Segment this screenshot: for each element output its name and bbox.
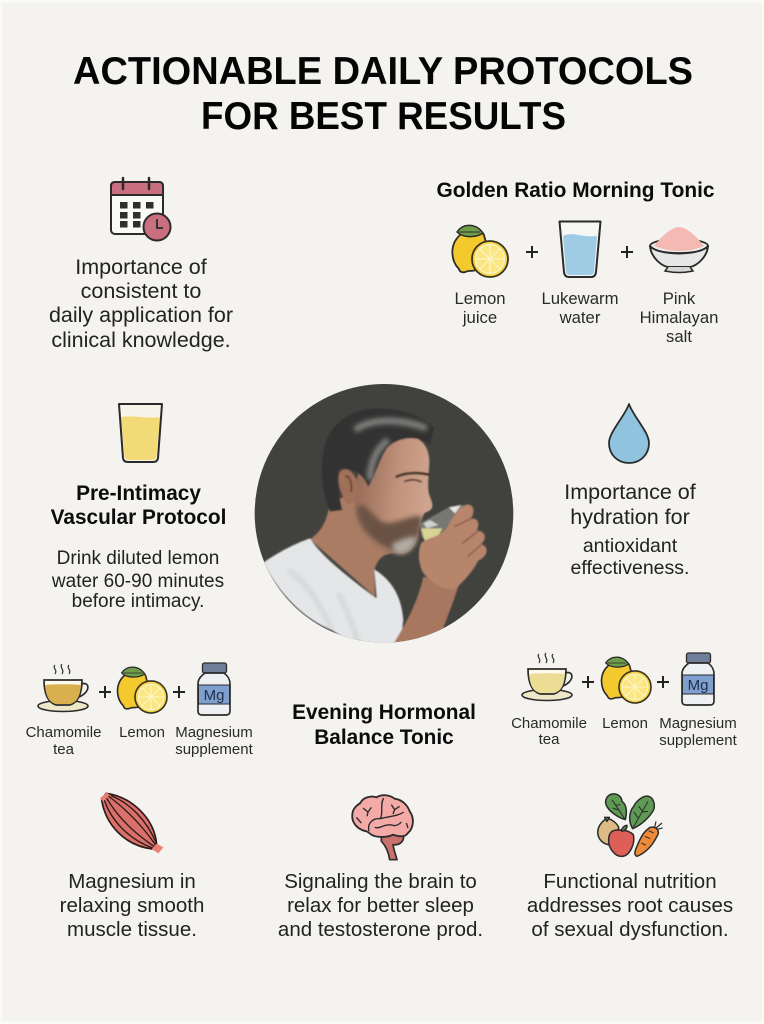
panel: evening tonic right ingredients (511, 653, 738, 749)
panel: golden ratio morning tonic (436, 179, 718, 346)
icon: chamomile tea (522, 653, 572, 700)
icon: plus (621, 246, 633, 258)
labels: right ingredients: Lemon (602, 715, 648, 732)
icon: magnesium bottle (198, 663, 230, 715)
icon: lemon (118, 667, 167, 713)
labels: right ingredients: tea (539, 731, 560, 748)
labels: morning ingredients: water (559, 308, 601, 327)
text: brain: Signaling the brain to (284, 870, 477, 893)
labels: morning ingredients: Lemon (454, 289, 506, 308)
panel: brain signaling (278, 795, 483, 941)
heading: pre-intimacy: Vascular Protocol (51, 506, 226, 529)
labels: right ingredients: supplement (659, 732, 738, 749)
icon: magnesium bottle (682, 653, 714, 705)
text: consistency: Importance of (75, 255, 207, 279)
icon: lemon (452, 225, 508, 277)
labels: morning ingredients: Pink (663, 289, 696, 308)
icon: water drop (609, 404, 649, 463)
shirt (263, 538, 403, 647)
text: consistency: daily application for (49, 303, 233, 327)
icon: plus (526, 246, 538, 258)
text: magnesium: Magnesium in (68, 870, 196, 893)
face (355, 436, 432, 554)
text: consistency: clinical knowledge. (51, 328, 231, 352)
eye and brow (397, 473, 429, 477)
labels: left ingredients: Chamomile (26, 724, 101, 741)
heading: golden ratio: Golden Ratio Morning Tonic (436, 179, 714, 202)
icon: glass of water (560, 222, 600, 277)
hair (322, 408, 434, 512)
panel: hydration (564, 404, 696, 579)
text: functional nutrition: addresses root causes (527, 894, 733, 917)
title (73, 50, 693, 138)
text: hydration: hydration for (570, 505, 690, 529)
labels: left ingredients: Lemon (119, 724, 165, 741)
icon: muscle (100, 792, 163, 853)
portrait: man drinking lemon water (252, 380, 518, 647)
panel: pre-intimacy vascular protocol (51, 404, 226, 612)
neck and chest (310, 496, 395, 597)
icon: plus (657, 676, 669, 688)
labels: right ingredients: Chamomile (511, 715, 587, 732)
labels: left ingredients: supplement (175, 741, 254, 758)
labels: morning ingredients: juice (462, 308, 497, 327)
icon: glass of lemon water (119, 404, 162, 462)
labels: morning ingredients: Lukewarm (542, 289, 618, 308)
labels: left ingredients: tea (53, 741, 75, 758)
icon: chamomile tea (38, 664, 88, 712)
glass (420, 504, 464, 538)
panel: magnesium muscle (60, 792, 204, 941)
icon: lemon (602, 657, 651, 703)
title: ACTIONABLE DAILY PROTOCOLS (73, 50, 693, 93)
text: magnesium: relaxing smooth (60, 894, 204, 917)
icon: plus (582, 676, 594, 688)
heading: evening hormonal balance tonic: Evening Hormonal (292, 701, 476, 724)
panel: evening tonic left ingredients (26, 663, 254, 758)
labels: left ingredients: Magnesium (175, 724, 253, 741)
text: hydration: Importance of (564, 480, 696, 504)
title: FOR BEST RESULTS (201, 95, 566, 138)
lower arm (392, 577, 458, 647)
icon: plus (173, 686, 185, 698)
text: consistency: consistent to (81, 279, 201, 303)
text: brain: and testosterone prod. (278, 918, 483, 941)
text: brain: relax for better sleep (287, 894, 474, 917)
labels: morning ingredients: Himalayan (640, 308, 718, 327)
icon: calendar with clock (111, 178, 170, 240)
icon: vegetables and fruit (598, 794, 663, 856)
text: magnesium: muscle tissue. (67, 918, 197, 941)
labels: morning ingredients: salt (666, 327, 692, 346)
hand (419, 504, 487, 589)
text: pre-intimacy: Drink diluted lemon (57, 548, 219, 569)
panel: functional nutrition (527, 794, 733, 941)
heading: evening hormonal balance tonic: Balance Tonic (314, 726, 454, 749)
text: pre-intimacy: water 60-90 minutes (51, 571, 224, 592)
panel: consistency (49, 178, 233, 352)
text: hydration: antioxidant (583, 535, 678, 557)
icon: brain (352, 795, 413, 860)
text: pre-intimacy: before intimacy. (72, 591, 204, 612)
text: hydration: effectiveness. (571, 557, 689, 579)
icon: bowl of pink salt (650, 227, 708, 272)
ear (338, 469, 358, 504)
heading: pre-intimacy: Pre-Intimacy (76, 482, 201, 505)
beard (357, 505, 422, 554)
labels: right ingredients: Magnesium (659, 715, 737, 732)
icon: plus (99, 686, 111, 698)
text: functional nutrition: of sexual dysfunction. (531, 918, 729, 941)
text: functional nutrition: Functional nutrition (543, 870, 717, 893)
